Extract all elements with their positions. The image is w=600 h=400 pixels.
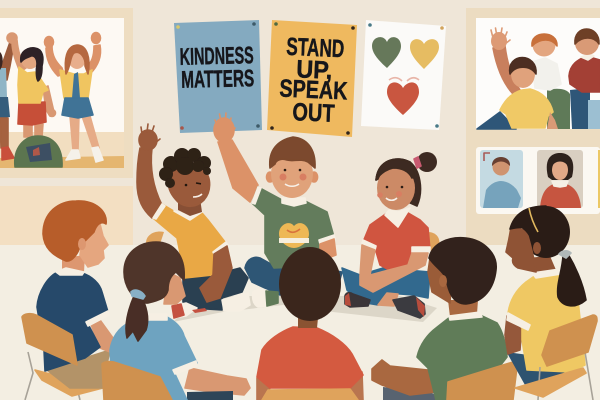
left wall frame with children photo bbox=[0, 8, 133, 178]
poster text: UP, bbox=[296, 55, 333, 85]
chair back bbox=[447, 362, 517, 400]
arm bbox=[90, 320, 113, 352]
shirt bbox=[153, 204, 225, 278]
scrunchie and bun bbox=[414, 152, 437, 172]
poster: three hearts bbox=[361, 20, 446, 130]
hand bbox=[139, 124, 160, 150]
ear bbox=[439, 275, 447, 287]
poster text: STAND bbox=[286, 33, 345, 63]
poster text: OUT bbox=[292, 98, 335, 128]
child in yellow shirt and red shorts bbox=[12, 40, 56, 137]
cheeks bbox=[377, 191, 402, 198]
shirt bbox=[363, 213, 430, 272]
curly hair bbox=[159, 148, 211, 188]
poster text: MATTERS bbox=[181, 65, 255, 94]
neck and collar bbox=[56, 255, 85, 275]
chairs behind seated children bbox=[146, 231, 439, 252]
right wall frame bbox=[466, 8, 600, 245]
portrait: boy in blue bbox=[480, 150, 523, 208]
yellow shirt bbox=[508, 270, 585, 372]
arms and hands bbox=[360, 245, 428, 292]
hand bbox=[214, 113, 235, 142]
hair bbox=[429, 238, 496, 304]
face bbox=[428, 258, 452, 303]
skin shin bbox=[378, 293, 398, 306]
sleeve trim bbox=[153, 204, 228, 254]
smile bbox=[386, 198, 397, 200]
poster text: KINDNESS bbox=[179, 42, 254, 71]
eyes bbox=[386, 186, 403, 188]
red heart bbox=[387, 82, 419, 115]
collar bbox=[385, 208, 410, 227]
shorts bbox=[508, 353, 573, 387]
green shirt bbox=[417, 315, 507, 400]
ponytail bbox=[126, 296, 148, 341]
shorts bbox=[47, 350, 110, 388]
face bbox=[271, 150, 313, 198]
floor shadow bbox=[173, 296, 437, 322]
ear bbox=[533, 242, 541, 254]
arm and hand bbox=[372, 360, 436, 395]
face bbox=[80, 224, 108, 267]
headband bbox=[529, 208, 538, 232]
boy in green shirt raising hand bbox=[214, 113, 342, 307]
raised arm bbox=[137, 148, 162, 218]
red hair bbox=[43, 201, 106, 261]
chair legs and seat bbox=[25, 352, 103, 400]
right arm bbox=[320, 239, 336, 258]
collar bbox=[146, 314, 167, 320]
hair bbox=[124, 242, 184, 303]
face bbox=[506, 227, 536, 272]
front hair bbox=[510, 206, 546, 240]
blue shirt bbox=[110, 315, 197, 400]
face bbox=[377, 166, 415, 210]
boy in green shirt from behind bbox=[372, 238, 517, 400]
ponytail bbox=[558, 254, 586, 306]
ponytail girl in blue shirt bbox=[102, 242, 250, 400]
heart brows bbox=[389, 78, 419, 81]
pants bbox=[383, 387, 446, 400]
legs bbox=[342, 268, 430, 305]
arm bbox=[185, 368, 250, 395]
ears bbox=[267, 172, 318, 182]
shirt heart bbox=[279, 223, 309, 248]
sleeve trim bbox=[173, 361, 197, 374]
girl in yellow shirt on chair bbox=[505, 206, 597, 400]
left arm bbox=[200, 246, 232, 302]
eyes and smile bbox=[185, 183, 202, 197]
yellow heart bbox=[410, 39, 439, 69]
left lower wall panel bbox=[0, 186, 133, 245]
poster text: SPEAK bbox=[279, 75, 348, 106]
sleeve trim bbox=[507, 313, 530, 330]
front chair bbox=[102, 362, 172, 400]
navy shirt bbox=[37, 272, 108, 371]
collar bbox=[282, 198, 306, 206]
boy in orange shirt raising hand bbox=[137, 124, 250, 318]
poster: Kindness Matters bbox=[174, 20, 262, 133]
chair bbox=[262, 389, 358, 400]
hair bbox=[522, 206, 570, 258]
poster: Stand Up, Speak Out bbox=[267, 20, 357, 137]
arm bbox=[505, 316, 522, 354]
hair front bbox=[376, 159, 414, 180]
raised arm and hand bbox=[491, 28, 520, 94]
hair bbox=[270, 137, 315, 168]
child in blue skirt waving bbox=[44, 32, 103, 162]
collar and neck bbox=[526, 256, 561, 278]
red-haired child on chair seen from behind bbox=[22, 201, 113, 400]
face bbox=[164, 272, 185, 304]
face bbox=[168, 167, 210, 206]
head bbox=[279, 247, 341, 321]
chair bbox=[515, 315, 597, 400]
green backpack bbox=[15, 136, 62, 167]
sleeve trim bbox=[86, 311, 109, 326]
neck bbox=[448, 300, 478, 317]
poster text bbox=[278, 33, 350, 128]
poster text bbox=[179, 42, 255, 94]
chair back bbox=[22, 314, 77, 365]
neck bbox=[298, 318, 318, 328]
ear bbox=[78, 238, 86, 250]
child in red shirt from behind bbox=[257, 247, 363, 400]
collar bbox=[174, 208, 202, 220]
arms bbox=[257, 372, 363, 400]
girl in red shirt bbox=[342, 152, 437, 318]
shirt bbox=[252, 187, 334, 268]
top photo of seated children bbox=[476, 18, 600, 129]
sleeve trim bbox=[252, 187, 335, 244]
shoe bbox=[253, 289, 278, 307]
pants bbox=[183, 268, 248, 310]
yellow card edge bbox=[598, 150, 600, 208]
child at photo edge bbox=[0, 33, 17, 160]
legs bbox=[245, 257, 342, 298]
shoes bbox=[172, 293, 250, 318]
bottom photo strip bbox=[476, 147, 600, 214]
cheeks and eyes bbox=[280, 169, 306, 180]
red shirt bbox=[257, 327, 363, 388]
green heart bbox=[372, 37, 401, 68]
sleeve trim bbox=[362, 240, 430, 252]
portrait: girl in red bbox=[537, 150, 583, 208]
raised arm bbox=[218, 140, 258, 202]
shoes bbox=[345, 293, 425, 318]
collar bbox=[449, 312, 482, 320]
pants bbox=[187, 391, 233, 400]
smile bbox=[285, 184, 299, 186]
hair tie bbox=[559, 251, 571, 258]
neck bbox=[178, 198, 202, 216]
hair tie bbox=[131, 290, 145, 299]
hair back bbox=[376, 159, 421, 206]
